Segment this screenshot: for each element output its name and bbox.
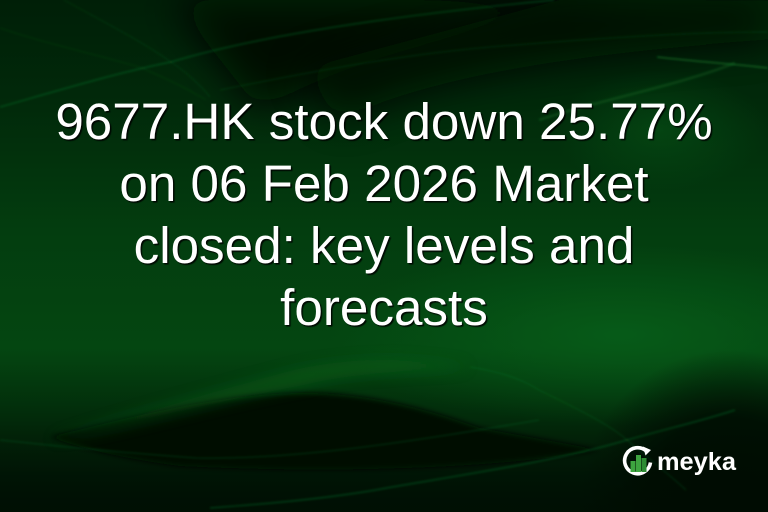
lower band and hill [0, 420, 768, 512]
top dark sweep [170, 0, 640, 110]
icon: chart ring [625, 446, 651, 474]
title: on 06 Feb 2026 Market [119, 155, 649, 212]
title [55, 93, 713, 336]
glowing ribbon [49, 360, 470, 440]
title: closed: key levels and [134, 217, 634, 274]
wordmark: meyka [657, 448, 737, 476]
title: 9677.HK stock down 25.77% [55, 93, 713, 150]
logo: meyka [622, 446, 737, 476]
title: forecasts [280, 279, 488, 336]
